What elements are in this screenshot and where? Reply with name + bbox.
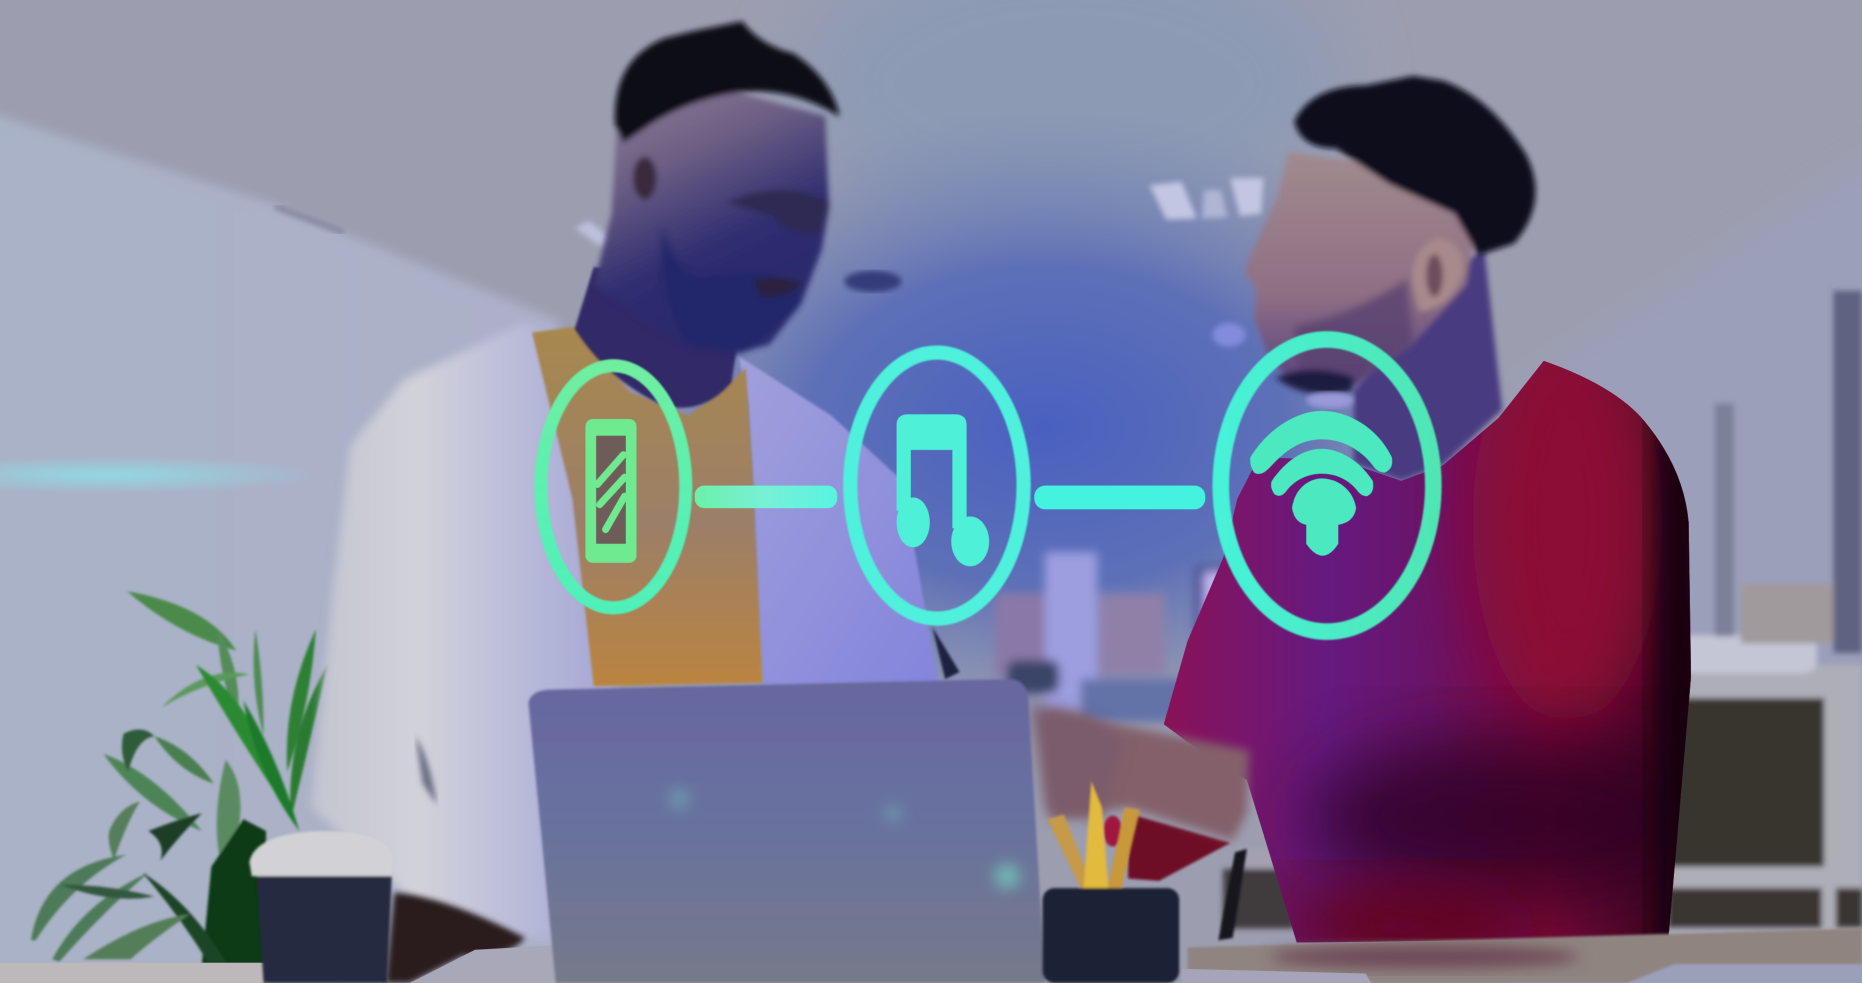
background: ceiling lights — [575, 178, 1264, 347]
background: dark wall streak — [276, 207, 344, 233]
laptop glow spots — [669, 788, 1020, 889]
person right: face — [1244, 76, 1535, 394]
person left: hand near cup — [386, 893, 525, 983]
background: chair leg — [1218, 849, 1247, 940]
person right: lower sleeve — [1128, 813, 1230, 881]
background: left wall — [0, 101, 558, 983]
person right: beard shade — [1294, 279, 1413, 386]
person left: cardigan — [311, 323, 618, 938]
person left: right cardigan panel — [739, 356, 938, 686]
desk shadow under sweater — [1271, 945, 1579, 969]
pencil holder — [1043, 781, 1179, 983]
person left: beard — [661, 226, 798, 351]
coffee cup — [249, 831, 392, 983]
background: right shelving unit — [1223, 291, 1862, 950]
connector line two — [1034, 486, 1205, 509]
background: distant office furniture — [995, 552, 1230, 722]
person right: inner ear — [1426, 254, 1443, 297]
desk paper — [1182, 969, 1372, 983]
desk left — [0, 963, 271, 983]
person left: head — [594, 21, 840, 354]
left horizontal lens flare — [0, 456, 321, 494]
person right: chin shadow — [1275, 370, 1354, 394]
person right: hair — [1294, 76, 1535, 255]
person left: mouth — [754, 278, 803, 297]
background: upper blue ceiling tint — [796, 0, 1342, 237]
person left: yellow shirt — [532, 326, 762, 686]
person left: hair — [615, 21, 840, 142]
background: right wall — [1508, 142, 1862, 983]
sweater: dark waist shadow — [1306, 736, 1710, 902]
connected icon overlay — [541, 340, 1433, 632]
person left: glasses and eye — [727, 190, 829, 234]
person left: neck — [575, 267, 736, 408]
background: pale blob below the chin — [1306, 392, 1354, 408]
sweater: red hem — [1271, 884, 1532, 968]
connector line one — [695, 486, 837, 508]
person right: neck — [1354, 249, 1502, 481]
person left: ear — [633, 157, 657, 199]
background: ceiling vent — [844, 271, 901, 292]
sweater: red shoulder — [1472, 321, 1662, 724]
person right: hand — [1031, 706, 1122, 819]
icon: music note in ring — [850, 353, 1024, 619]
person right: sweater — [1164, 361, 1692, 943]
person right: fingernail — [1103, 816, 1122, 846]
person left: sleeve crease — [416, 736, 437, 805]
person right: ear — [1412, 237, 1463, 311]
background: blue lit centre of the room — [570, 107, 1520, 748]
sweater: dark right side — [1657, 380, 1704, 950]
plant — [31, 591, 328, 964]
icon: wifi in ring — [1221, 340, 1433, 632]
laptop — [528, 679, 1045, 983]
icon: phone in ring — [541, 366, 686, 608]
background: chair edge behind laptop — [932, 627, 960, 679]
desk right — [1188, 928, 1862, 983]
desk left near the laptop — [410, 945, 558, 983]
person right: forearm — [1045, 712, 1249, 841]
